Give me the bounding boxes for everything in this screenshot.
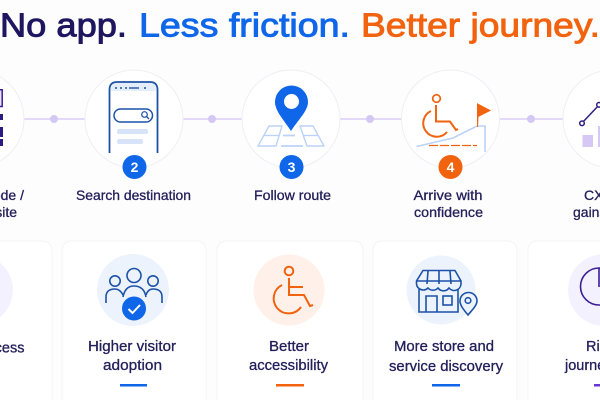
- card text: [249, 339, 329, 374]
- title: No app.: [0, 6, 127, 44]
- icon: wheelchair ramp and flag: [416, 95, 490, 152]
- card 4: more store and service discovery: [373, 241, 517, 400]
- number badge 2: 2: [131, 159, 139, 175]
- step 1: scan QR code: [0, 70, 24, 220]
- label: Arrive with: [414, 187, 482, 203]
- title: Better journey.: [361, 6, 600, 44]
- step 3: follow route: [242, 70, 340, 203]
- card text: [389, 339, 504, 375]
- icon: QR code: [0, 90, 3, 146]
- step 2: search destination: [76, 70, 191, 203]
- icon: visitors with checkmark: [106, 268, 162, 320]
- label: confidence: [414, 204, 483, 220]
- label: Follow route: [254, 187, 331, 203]
- accent bar: [276, 384, 304, 386]
- card text: [564, 339, 600, 374]
- accent bar: [594, 384, 600, 386]
- card 3: better accessibility: [217, 241, 363, 400]
- card text: More store and: [394, 339, 494, 355]
- step 4: arrive with confidence: [402, 70, 500, 220]
- card 2: higher visitor adoption: [62, 241, 206, 400]
- accent bar: [120, 384, 147, 386]
- card 5: richer journeys: [528, 241, 600, 400]
- card 1: access: [0, 241, 52, 400]
- card text: Better: [269, 339, 309, 355]
- icon: pie clock: [580, 268, 600, 305]
- title: Less friction.: [139, 6, 350, 44]
- icon: growth chart: [580, 102, 600, 147]
- number badge 4: 4: [447, 159, 455, 175]
- accent bar: [432, 384, 460, 386]
- icon: wheelchair: [274, 267, 313, 313]
- card text: Higher visitor: [88, 339, 176, 355]
- label: [573, 187, 600, 220]
- card text: service discovery: [389, 359, 504, 375]
- icon: phone with search bar: [110, 82, 158, 153]
- icon: storefront with pin: [416, 270, 477, 315]
- label: [0, 187, 24, 220]
- card text: [88, 339, 176, 374]
- icon: map pin on map: [258, 86, 324, 146]
- number badge 4: [438, 155, 462, 179]
- title: [0, 6, 600, 44]
- card text: accessibility: [249, 358, 329, 374]
- step 5: CX gains: [563, 70, 600, 220]
- label: [414, 187, 483, 220]
- number badge 3: 3: [288, 159, 296, 175]
- label: Search destination: [76, 187, 191, 203]
- card text: adoption: [103, 358, 162, 374]
